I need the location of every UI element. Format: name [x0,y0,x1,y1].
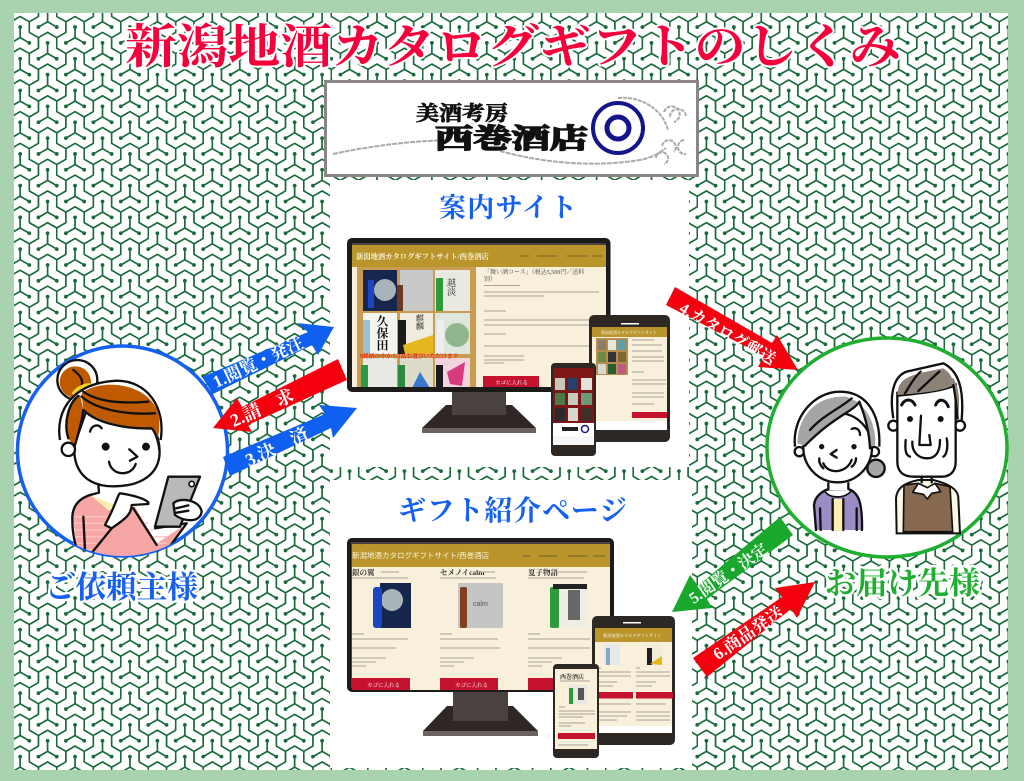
notice text: 9銘柄の中から1品お選びいただけます [360,352,459,360]
panel: gift page background [330,480,692,768]
product: semenoi calm: セメノイcalm [440,568,485,577]
arrow 3: payment [223,405,357,476]
product: gin no tsubasa: 銀の翼 [352,567,376,577]
monitor: guide site [347,238,610,433]
product image grid [357,267,476,388]
arrow 4: mail catalog [666,287,798,370]
arrow 5: browse and decide: 5.閲覧・決定 [685,539,771,608]
tablet: gift page: 新潟地酒カタログギフトサイト [603,632,661,639]
course title: 「舞い酒コース」（税込5,500円／送料 [484,268,584,276]
panel: shop logo [326,82,698,176]
circle: recipients [767,338,1007,557]
product: semenoi calm: calm [473,601,488,608]
monitor: gift page [347,538,614,736]
phone: guide site [551,363,596,456]
site title: 新潟地酒カタログギフトサイト/西巻酒店 [352,550,490,560]
arrow 4: mail catalog: 4.カタログ郵送 [676,298,780,369]
product: natsuko monogatari [528,567,590,690]
arrow 2: invoice: 2.請 求 [227,385,297,431]
add to cart button [483,376,539,387]
illustration: elderly couple [795,363,965,533]
product image grid: 久保田 [375,314,389,351]
product: semenoi calm [440,568,503,690]
product image grid: 越淡 [446,277,456,297]
arrow 2: invoice [213,359,347,432]
course title second line: 別） [484,275,496,283]
tablet: gift page [592,616,675,745]
heading: gift page: ギフト紹介ページ [398,495,627,527]
circle: client [18,346,228,557]
product: gin no tsubasa: カゴに入れる [367,681,400,689]
arrow 6: ship product [693,582,815,677]
arrow 5: browse and decide [672,517,793,612]
arrow 1: browse and order: 1.閲覧・発注 [209,332,307,392]
add to cart button: カゴに入れる [495,378,528,386]
tablet: guide site: 新潟地酒カタログギフトサイト [601,329,657,335]
product: semenoi calm: カゴに入れる [455,681,488,689]
product: natsuko monogatari: 夏子物語 [528,567,558,577]
site title: 新潟地酒カタログギフトサイト/西巻酒店 [356,252,490,261]
panel: guide site background [330,180,689,467]
tablet: guide site [589,315,670,442]
logo mark [593,103,643,153]
title: 新潟地酒カタログギフトのしくみ [125,22,901,74]
illustration: woman with smartphone [57,360,202,557]
logo shop name: 西巻酒店 [435,124,588,154]
phone: gift page: 西巻酒店 [560,673,584,681]
arrow 6: ship product: 6.商品発送 [709,602,788,664]
logo text: 美酒考房 [416,101,508,125]
arrow 3: payment: 3.決 済 [242,424,312,470]
phone: gift page [553,664,599,758]
heading: guide site: 案内サイト [439,193,577,223]
label: client: ご依頼主様 [45,570,198,605]
arrow 1: browse and order [202,323,334,394]
product image grid: 麒麟 [414,313,424,331]
product: gin no tsubasa [352,567,411,690]
label: recipients: お届け先様 [825,566,980,601]
